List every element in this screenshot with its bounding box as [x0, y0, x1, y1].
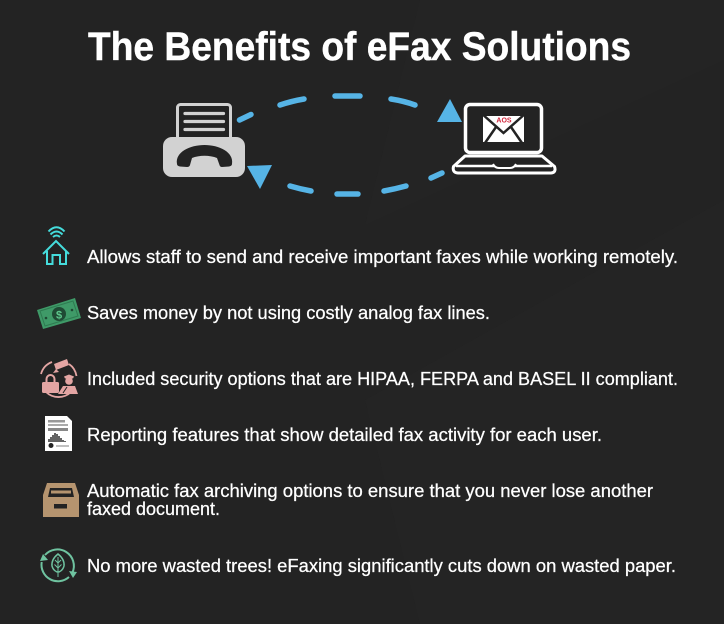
text: archiving: Automatic fax archiving options to ensure that you never lose another — [87, 480, 653, 501]
icon: recycling leaf — [40, 549, 77, 581]
benefit: security — [41, 359, 678, 397]
icon: house with wifi — [43, 227, 69, 264]
text: security: Included security options that are HIPAA, FERPA and BASEL II compliant. — [87, 368, 678, 389]
benefit: saves trees — [40, 549, 676, 581]
title: The Benefits of eFax Solutions — [88, 25, 631, 69]
text: reporting: Reporting features that show detailed fax activity for each user. — [87, 424, 602, 445]
icon: archive box — [43, 483, 79, 517]
icon: laptop with envelope — [453, 104, 555, 173]
benefit: saves money — [37, 298, 490, 329]
text: remote work: Allows staff to send and receive important faxes while working remotely. — [87, 246, 678, 267]
arrow: dashed path from fax to computer — [240, 96, 462, 122]
icon: security ring — [41, 359, 78, 397]
icon: envelope: AOS — [496, 118, 512, 124]
benefit: reporting — [45, 416, 602, 451]
benefit: archiving — [43, 480, 653, 519]
text: saves money: Saves money by not using costly analog fax lines. — [87, 302, 490, 323]
text: archiving: faxed document. — [87, 498, 220, 519]
icon: fax machine — [163, 104, 245, 177]
icon: report document — [45, 416, 72, 451]
arrow: dashed path from computer to fax — [247, 165, 442, 194]
text: archiving — [87, 480, 653, 519]
icon: banknote — [37, 298, 81, 329]
icon: banknote: $ — [56, 310, 62, 322]
diagram: fax to computer exchange — [163, 96, 555, 194]
text: saves trees: No more wasted trees! eFaxing significantly cuts down on wasted paper. — [87, 555, 676, 576]
benefit: remote work — [43, 227, 678, 267]
